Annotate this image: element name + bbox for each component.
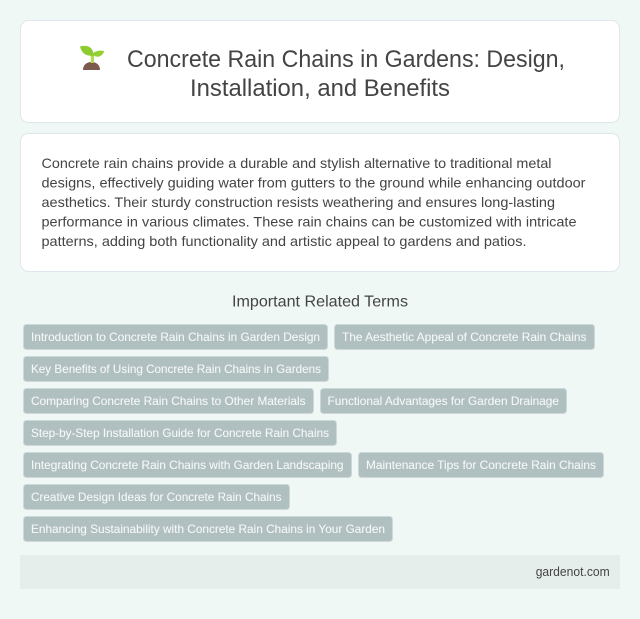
- text block: description: patterns, adding both functionality and artistic appeal to gardens and patios.: [42, 233, 526, 249]
- tag: comparing materials: [24, 388, 314, 414]
- tag: installation guide: [24, 420, 336, 446]
- panel: title header: [20, 20, 620, 122]
- tag: functional advantages: [320, 388, 566, 414]
- tag: key benefits: Key Benefits of Using Concrete Rain Chains in Gardens: [31, 362, 321, 376]
- footer: gardenot.com: [536, 565, 610, 579]
- text block: description: performance in various climates. These rain chains can be customized with intricate: [42, 214, 577, 230]
- tag: installation guide: Step-by-Step Installation Guide for Concrete Rain Chains: [31, 426, 329, 440]
- footer: [20, 555, 620, 589]
- text block: description: [42, 155, 586, 249]
- tag: maintenance tips: [358, 452, 604, 478]
- heading: title: Installation, and Benefits: [190, 75, 450, 102]
- heading: title: [127, 46, 565, 102]
- tag: functional advantages: Functional Advantages for Garden Drainage: [328, 394, 559, 408]
- tag: introduction: Introduction to Concrete Rain Chains in Garden Design: [31, 330, 320, 344]
- panel: related term tags: [24, 324, 604, 542]
- tag: comparing materials: Comparing Concrete Rain Chains to Other Materials: [31, 394, 306, 408]
- tag: integrating landscaping: [24, 452, 352, 478]
- tag: enhancing sustainability: [24, 516, 392, 542]
- text block: description: designs, effectively guiding water from gutters to the ground while enhancing outdoor: [42, 174, 586, 190]
- panel: description: [20, 134, 620, 272]
- heading: important related terms: Important Related Terms: [232, 294, 408, 310]
- tag: aesthetic appeal: [334, 324, 594, 350]
- tag: introduction: [24, 324, 328, 350]
- icon: seedling: [80, 46, 104, 70]
- text block: description: Concrete rain chains provide a durable and stylish alternative to traditional metal: [42, 155, 552, 171]
- tag: enhancing sustainability: Enhancing Sustainability with Concrete Rain Chains in Your Garden: [31, 522, 385, 536]
- text block: description: aesthetics. Their sturdy construction resists weathering and ensures long-lasting: [42, 194, 555, 210]
- tag: creative design ideas: [24, 484, 290, 510]
- tag: maintenance tips: Maintenance Tips for Concrete Rain Chains: [366, 458, 596, 472]
- heading: title: Concrete Rain Chains in Gardens: Design,: [127, 46, 565, 73]
- tag: integrating landscaping: Integrating Concrete Rain Chains with Garden Landscaping: [31, 458, 344, 472]
- tag: creative design ideas: Creative Design Ideas for Concrete Rain Chains: [31, 490, 282, 504]
- tag: key benefits: [24, 356, 328, 382]
- tag: aesthetic appeal: The Aesthetic Appeal of Concrete Rain Chains: [342, 330, 586, 344]
